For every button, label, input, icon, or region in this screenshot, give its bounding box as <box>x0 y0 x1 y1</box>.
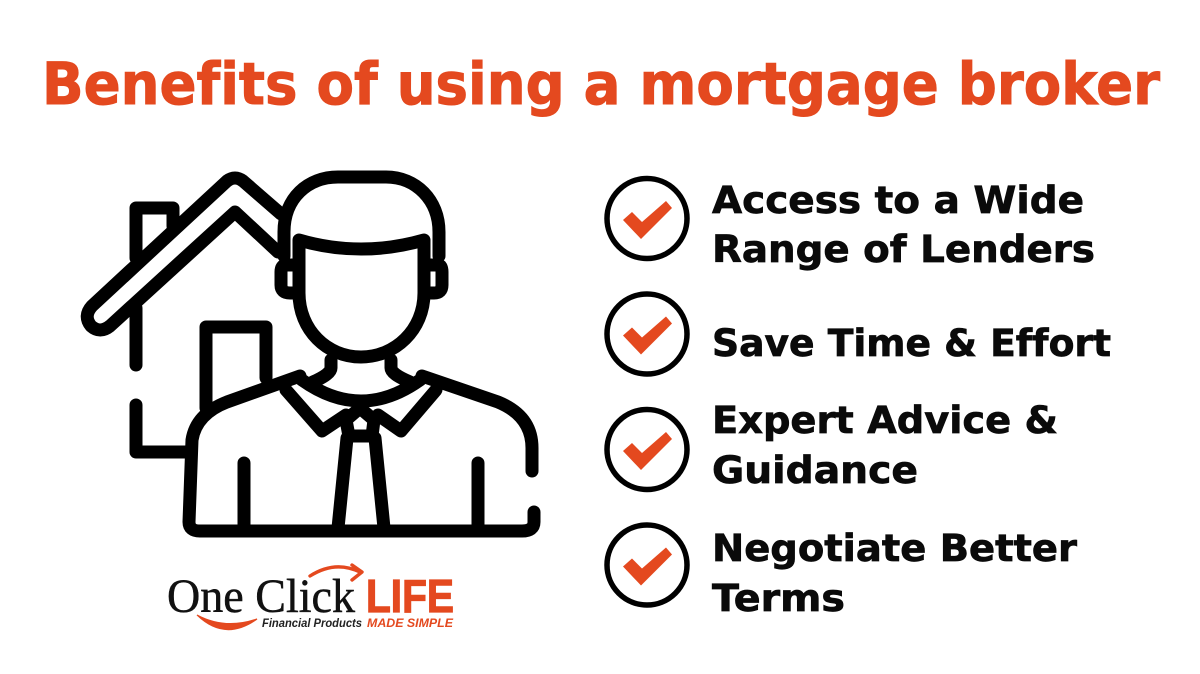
icon: house roof <box>87 178 281 330</box>
icon: house door <box>206 327 266 408</box>
icon: collar <box>286 380 436 431</box>
icon: hair <box>284 177 439 256</box>
benefit: save time <box>607 294 1111 374</box>
benefit text: Negotiate Better <box>712 527 1078 570</box>
icon: ears <box>281 265 442 293</box>
logo arrow <box>310 565 362 580</box>
logo wordmark: One Click <box>167 570 355 623</box>
benefit text: Save Time & Effort <box>712 322 1111 365</box>
icon: check circle <box>607 294 687 374</box>
benefit text: Access to a Wide <box>712 179 1084 222</box>
logo tagline accent: MADE SIMPLE <box>367 618 453 630</box>
logo swoosh <box>197 615 257 630</box>
icon: chimney <box>136 208 173 258</box>
icon: shirt and shoulders <box>189 376 534 531</box>
logo word LIFE: LIFE <box>366 570 454 622</box>
icon: tie <box>338 408 384 528</box>
benefit text: Terms <box>712 577 845 620</box>
benefit: negotiate terms <box>607 525 1078 620</box>
icon: house walls <box>136 308 186 452</box>
logo tagline: Financial Products <box>262 618 362 630</box>
benefit text: Guidance <box>712 449 918 492</box>
benefit text: Expert Advice & <box>712 399 1058 442</box>
icon: broker in front of house <box>87 177 534 531</box>
icon: check circle <box>607 410 687 490</box>
logo: One Click Life <box>167 565 454 630</box>
icon: check circle <box>607 525 687 605</box>
icon: face <box>299 240 424 357</box>
icon: arm lines <box>244 463 478 528</box>
benefit: wide range of lenders <box>607 178 1095 271</box>
icon: neck <box>313 360 410 382</box>
benefit: expert advice <box>607 399 1058 492</box>
title: Benefits of using a mortgage broker <box>42 50 1160 118</box>
benefit text: Range of Lenders <box>712 228 1095 271</box>
icon: check circle <box>607 178 687 258</box>
